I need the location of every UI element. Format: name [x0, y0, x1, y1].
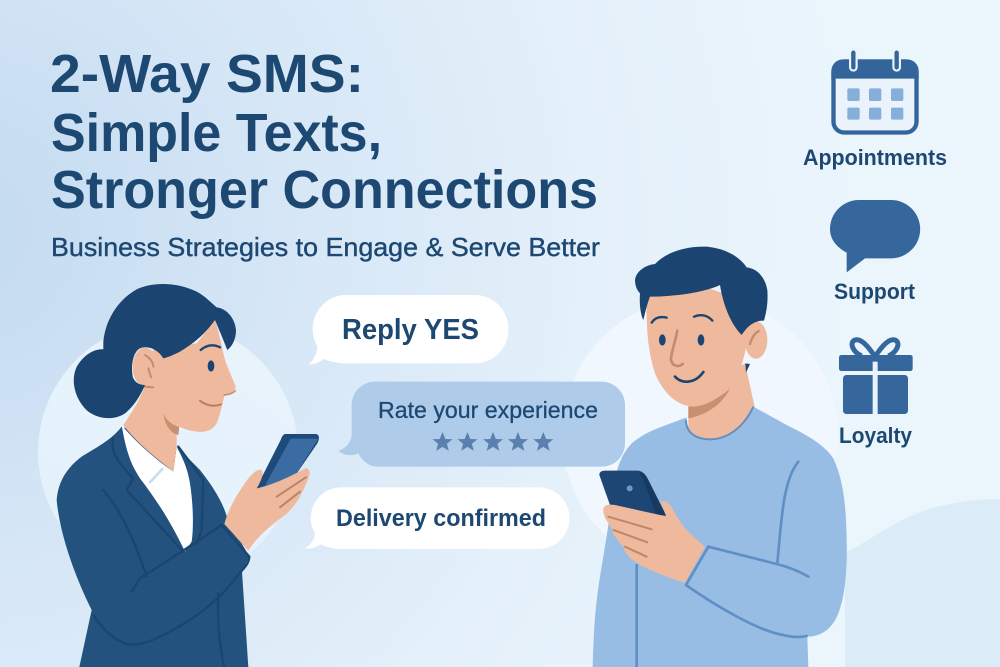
woman phone	[255, 434, 319, 491]
man nose and mouth	[671, 331, 683, 366]
woman jacket	[57, 427, 249, 667]
backdrop circle: man	[562, 297, 838, 573]
backdrop circle: woman	[38, 322, 298, 582]
woman ear	[133, 348, 157, 386]
title: Simple Texts,	[51, 103, 382, 163]
label: Loyalty: Loyalty	[839, 423, 913, 448]
label: Support: Support	[834, 279, 916, 304]
title: 2-Way SMS:	[50, 44, 364, 104]
bubble: Delivery confirmed	[305, 487, 569, 549]
woman illustration	[57, 284, 319, 667]
man face	[647, 287, 748, 407]
woman jacket lines	[93, 438, 249, 667]
man sweater lines	[637, 462, 808, 667]
woman hand	[224, 468, 309, 551]
woman eye and brow	[208, 360, 214, 372]
man sweater	[593, 407, 847, 667]
man hand	[603, 501, 705, 583]
icon: gift	[839, 340, 913, 415]
man neck	[688, 363, 755, 443]
title: Stronger Connections	[51, 160, 598, 220]
woman hair	[74, 284, 236, 418]
man ear	[745, 321, 767, 359]
man neck shadow	[688, 388, 730, 418]
bubble: Reply YES: Reply YES	[342, 314, 479, 346]
bubble: Reply YES	[308, 295, 508, 364]
man phone	[599, 471, 667, 517]
chat bubbles	[305, 295, 625, 549]
label: Appointments: Appointments	[803, 145, 947, 170]
woman shirt	[122, 425, 193, 552]
woman face and neck	[123, 320, 236, 472]
star rating	[432, 432, 553, 451]
icon: speech bubble	[830, 200, 920, 272]
man illustration	[593, 247, 847, 667]
bubble: Rate your experience	[338, 382, 625, 467]
subtitle: Business Strategies to Engage & Serve Better	[51, 232, 600, 262]
title	[50, 44, 598, 220]
woman nose and mouth	[224, 391, 235, 395]
man eyes and brows	[652, 315, 712, 346]
bubble: Rate your experience: Rate your experience	[378, 397, 598, 423]
bubble: Delivery confirmed: Delivery confirmed	[336, 505, 546, 532]
man hair	[635, 247, 768, 335]
icon: calendar	[831, 53, 919, 132]
